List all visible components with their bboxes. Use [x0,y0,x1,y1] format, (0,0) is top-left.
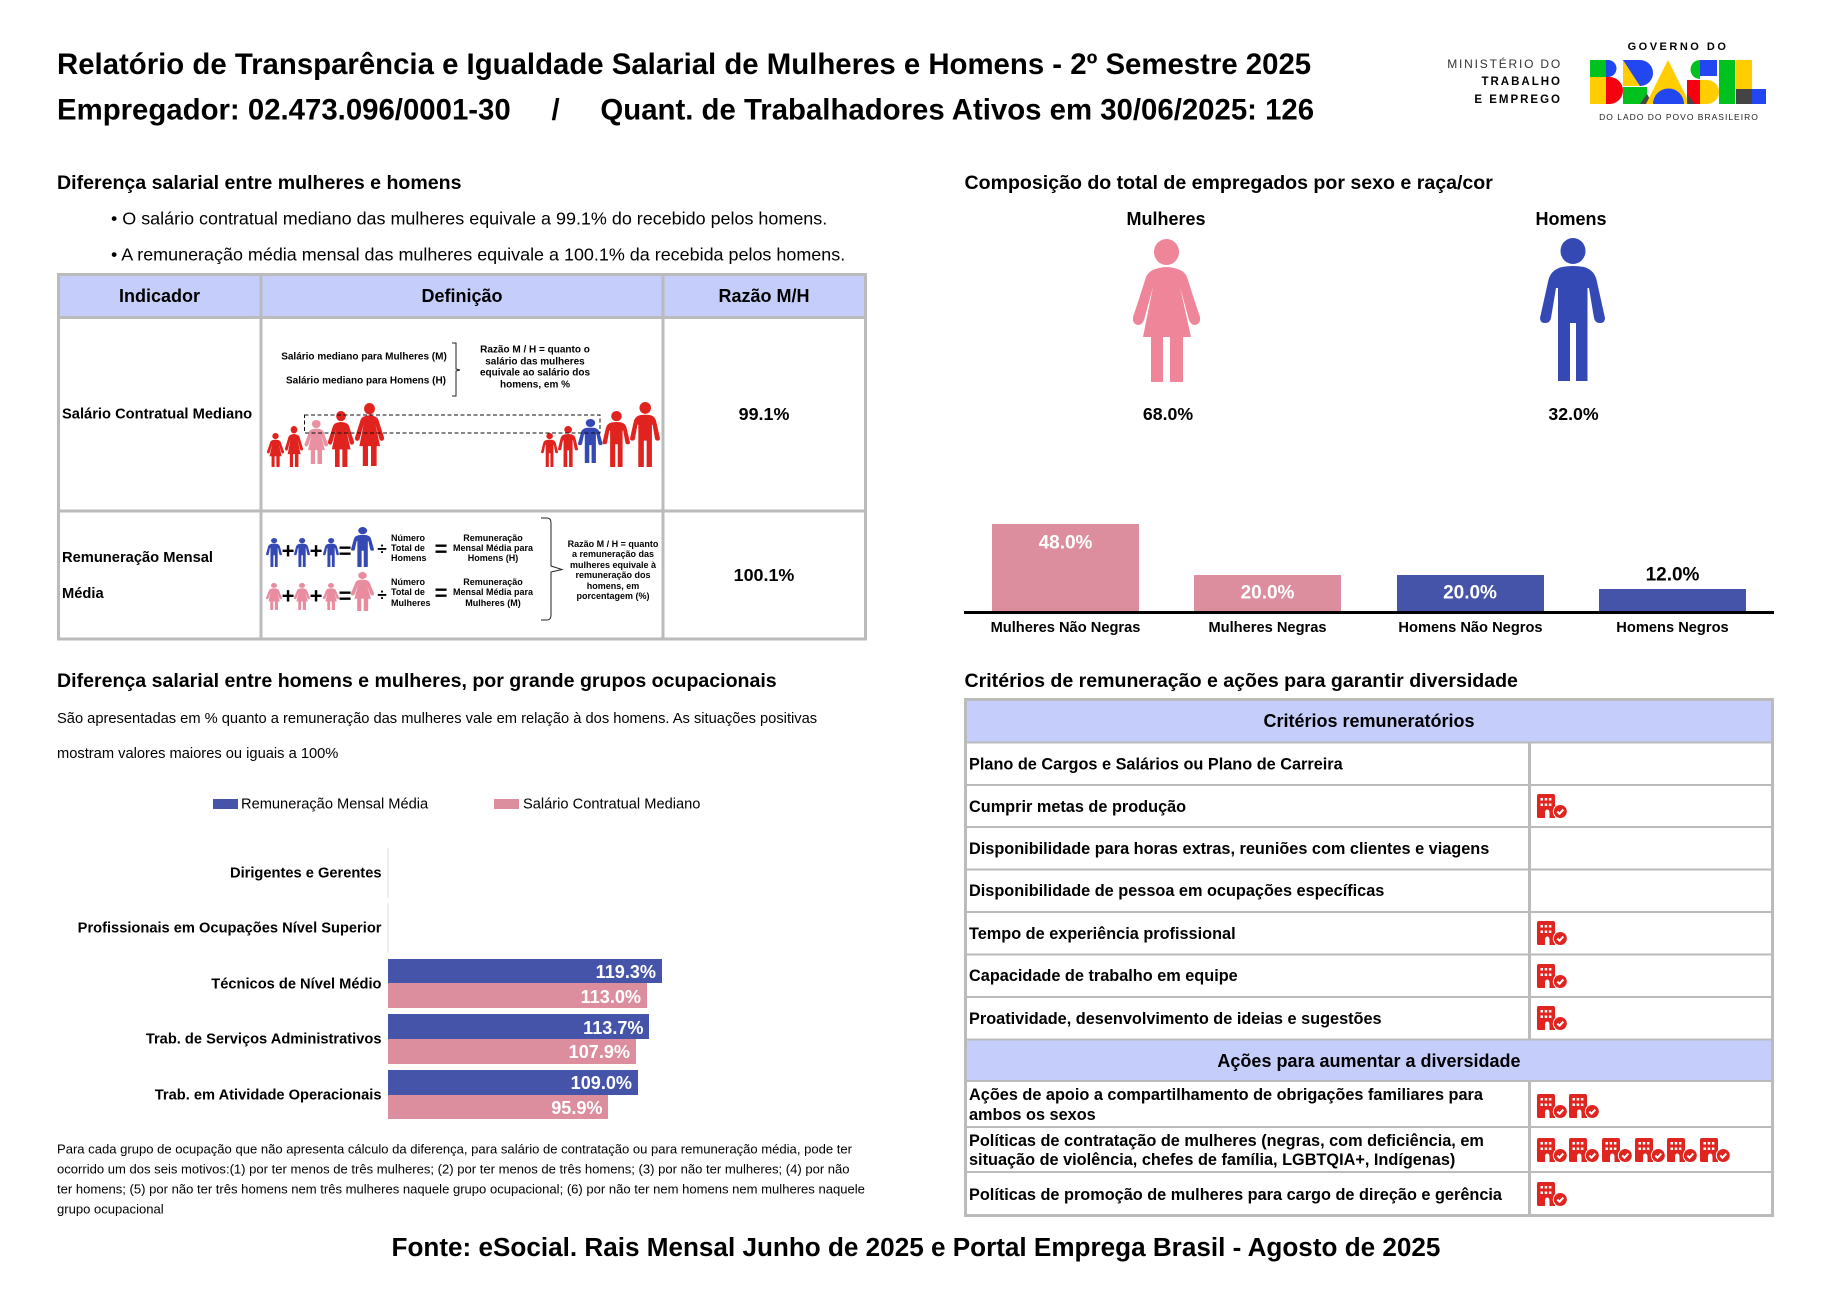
heading: diferença salarial: Diferença salarial entre mulheres e homens [57,172,462,194]
criteria rows [969,756,1489,1028]
bar chart: grupos ocupacionais: Técnicos de Nível Médio [211,976,382,992]
table: indicadores: Indicador [119,286,200,306]
bar chart: composição raça/cor [964,524,1774,636]
row: salário contratual mediano [62,343,789,467]
table: indicadores [58,274,866,639]
legend [213,796,700,812]
operators: ÷ [377,586,387,604]
definition: remuneração text: Número [391,577,426,587]
criteria rows: Tempo de experiência profissional [969,925,1236,943]
action rows: Políticas de contratação de mulheres (negras, com deficiência, em [969,1132,1484,1150]
operators: ÷ [377,540,387,558]
title [57,48,1314,126]
legend: Remuneração Mensal Média [241,796,429,812]
title: Relatório de Transparência e Igualdade Salarial de Mulheres e Homens - 2º Semestre 2025 [57,48,1311,81]
action rows: Políticas de promoção de mulheres para cargo de direção e gerência [969,1186,1503,1204]
icons: critérios adotados [1537,794,1568,1031]
definition: mediana text: Razão M / H = quanto o [480,344,590,356]
pictogram: homens 32%: 32.0% [1548,404,1599,424]
row: remuneração mensal média [62,518,794,620]
dashed median box [304,415,600,433]
logo: Governo do Brasil: GOVERNO DO [1628,41,1728,53]
operators: + [310,584,322,608]
definition: remuneração text: Mensal Média para [453,543,534,553]
criteria rows: Plano de Cargos e Salários ou Plano de Carreira [969,756,1344,774]
bar chart: composição raça/cor: 48.0% [1039,532,1093,554]
bar chart: composição raça/cor: Mulheres Não Negras [991,620,1140,636]
table: indicadores: Definição [421,286,503,306]
definition: mediana text: Salário mediano para Mulheres (M) [281,352,447,362]
bar chart: composição raça/cor: 12.0% [1646,564,1700,586]
definition: remuneração text: a remuneração das [572,549,654,559]
operators: = [435,580,447,606]
action rows: situação de violência, chefes de família, LGBTQIA+, Indígenas) [969,1151,1455,1169]
logo: Governo do Brasil: DO LADO DO POVO BRASILEIRO [1599,112,1759,122]
paragraph: explicação: mostram valores maiores ou iguais a 100% [57,746,338,762]
bar chart: grupos ocupacionais: Dirigentes e Gerentes [230,866,382,882]
paragraph: explicação [57,711,817,762]
icons: ações adotadas [1537,1094,1731,1207]
row: remuneração mensal média: Remuneração Mensal [62,550,213,566]
action rows: ambos os sexos [969,1106,1096,1124]
bar chart: composição raça/cor: Homens Negros [1616,620,1729,636]
criteria rows: Disponibilidade para horas extras, reuniões com clientes e viagens [969,840,1489,858]
definition: remuneração text: Número [391,533,426,543]
figures: homens mediana [541,402,660,467]
definition: mediana text: equivale ao salário dos [480,368,590,378]
heading: diferença por grupos ocupacionais: Diferença salarial entre homens e mulheres, por grande grupos ocupacionais [57,670,777,692]
bullets: resumo salarial: • O salário contratual mediano das mulheres equivale a 99.1% do recebido pelos homens. [111,208,827,228]
definition: remuneração text: porcentagem (%) [576,591,650,601]
legend: Salário Contratual Mediano [523,796,700,812]
definition: remuneração text: Homens (H) [468,553,518,563]
row: salário contratual mediano: Salário Contratual Mediano [62,406,252,422]
title: Empregador: 02.473.096/0001-30 / Quant. de Trabalhadores Ativos em 30/06/2025: 126 [57,94,1314,126]
bar chart: grupos ocupacionais: 113.0% [581,987,641,1007]
bar chart: grupos ocupacionais: Trab. de Serviços Administrativos [146,1032,382,1048]
operators: = [339,538,351,564]
bar chart: composição raça/cor: 20.0% [1241,582,1295,604]
bar chart: grupos ocupacionais: Profissionais em Ocupações Nível Superior [78,920,382,936]
bar chart: composição raça/cor: Homens Não Negros [1398,620,1543,636]
section header: ações: Ações para aumentar a diversidade [1217,1051,1521,1071]
definition: remuneração text: Total de [391,543,425,553]
definition: remuneração text: Mulheres (M) [465,598,521,608]
heading: composição: Composição do total de empregados por sexo e raça/cor [964,172,1493,194]
criteria rows: Disponibilidade de pessoa em ocupações específicas [969,882,1384,900]
action rows [969,1086,1503,1204]
row: salário contratual mediano: 99.1% [739,404,789,424]
footnote: ocorrido um dos seis motivos:(1) por ter menos de três mulheres; (2) por ter menos de três homens; (3) por não ter mulheres; (4) por não [57,1162,850,1176]
footnote [57,1142,865,1216]
footer: fonte: Fonte: eSocial. Rais Mensal Junho de 2025 e Portal Emprega Brasil - Agosto de 2025 [392,1232,1440,1262]
operators: + [282,584,294,608]
pictogram: mulheres 68%: 68.0% [1143,404,1193,424]
figures: mulheres mediana [267,403,384,467]
bar chart: grupos ocupacionais: 113.7% [583,1018,644,1038]
definition: mediana text: salário das mulheres [485,356,585,368]
heading: critérios de remuneração: Critérios de remuneração e ações para garantir diversidade [964,670,1518,692]
pictogram: homens 32% [1535,209,1607,424]
definition: remuneração text: Mensal Média para [453,587,534,597]
bar chart: grupos ocupacionais: 119.3% [596,962,656,982]
bar chart: grupos ocupacionais: 95.9% [551,1098,602,1118]
figures: mulheres soma [266,572,374,611]
definition: mediana text: Salário mediano para Homens (H) [286,376,446,386]
bar chart: grupos ocupacionais: 107.9% [569,1042,630,1062]
logo: Ministério do Trabalho e Emprego [1447,56,1562,106]
bar chart: grupos ocupacionais: 109.0% [571,1073,632,1093]
operators: = [435,536,447,562]
definition: remuneração text: Homens [391,553,427,563]
figures: homens soma [266,527,374,567]
definition: mediana text: homens, em % [500,380,570,390]
paragraph: explicação: São apresentadas em % quanto a remuneração das mulheres vale em relação à dos homens. As situações positivas [57,711,817,727]
definition: remuneração text: homens, em [587,581,639,591]
definition: remuneração text: Mulheres [391,598,431,608]
operators: + [282,538,294,564]
bullets: resumo salarial [111,208,845,264]
criteria rows: Capacidade de trabalho em equipe [969,967,1238,985]
definition: remuneração text: remuneração dos [575,570,651,580]
row: remuneração mensal média: 100.1% [734,565,794,585]
logo: Governo do Brasil [1590,41,1766,122]
definition: remuneração text [391,518,659,620]
bar chart: grupos ocupacionais: Trab. em Atividade Operacionais [155,1088,382,1104]
section header: critérios remuneratórios: Critérios remuneratórios [1263,711,1475,731]
criteria rows: Proatividade, desenvolvimento de ideias e sugestões [969,1010,1382,1028]
bar chart: composição raça/cor: Mulheres Negras [1208,620,1327,636]
table: critérios e ações [966,700,1772,1216]
logo: Ministério do Trabalho e Emprego: E EMPREGO [1474,94,1562,106]
operators [282,536,447,608]
bar chart: composição raça/cor: 20.0% [1443,582,1497,604]
footnote: ter homens; (5) por não ter três homens nem três mulheres naquele grupo ocupacional; (6) por não ter nem homens nem mulheres naquele [57,1182,865,1196]
logo: Ministério do Trabalho e Emprego: TRABALHO [1481,76,1562,88]
pictogram: mulheres 68% [1126,209,1206,424]
criteria rows: Cumprir metas de produção [969,798,1186,816]
footnote: grupo ocupacional [57,1202,164,1216]
operators: + [310,538,322,564]
row: remuneração mensal média: Média [62,586,104,602]
action rows: Ações de apoio a compartilhamento de obrigações familiares para [969,1086,1484,1104]
footnote: Para cada grupo de ocupação que não apresenta cálculo da diferença, para salário de contratação ou para remuneração média, pode ter [57,1142,853,1156]
operators: = [339,584,351,608]
definition: remuneração text: Total de [391,587,425,597]
definition: remuneração text: mulheres equivale à [570,560,657,570]
definition: remuneração text: Razão M / H = quanto [568,539,659,549]
pictogram: mulheres 68%: Mulheres [1126,209,1206,229]
definition: remuneração text: Remuneração [463,533,523,543]
definition: remuneração text: Remuneração [463,577,523,587]
bar chart: grupos ocupacionais [78,848,662,1119]
table: indicadores: Razão M/H [718,286,810,306]
bullets: resumo salarial: • A remuneração média mensal das mulheres equivale a 100.1% da recebida pelos homens. [111,244,845,264]
definition: mediana text [281,343,590,396]
pictogram: homens 32%: Homens [1535,209,1607,229]
logo: Ministério do Trabalho e Emprego: MINISTÉRIO DO [1447,56,1562,71]
